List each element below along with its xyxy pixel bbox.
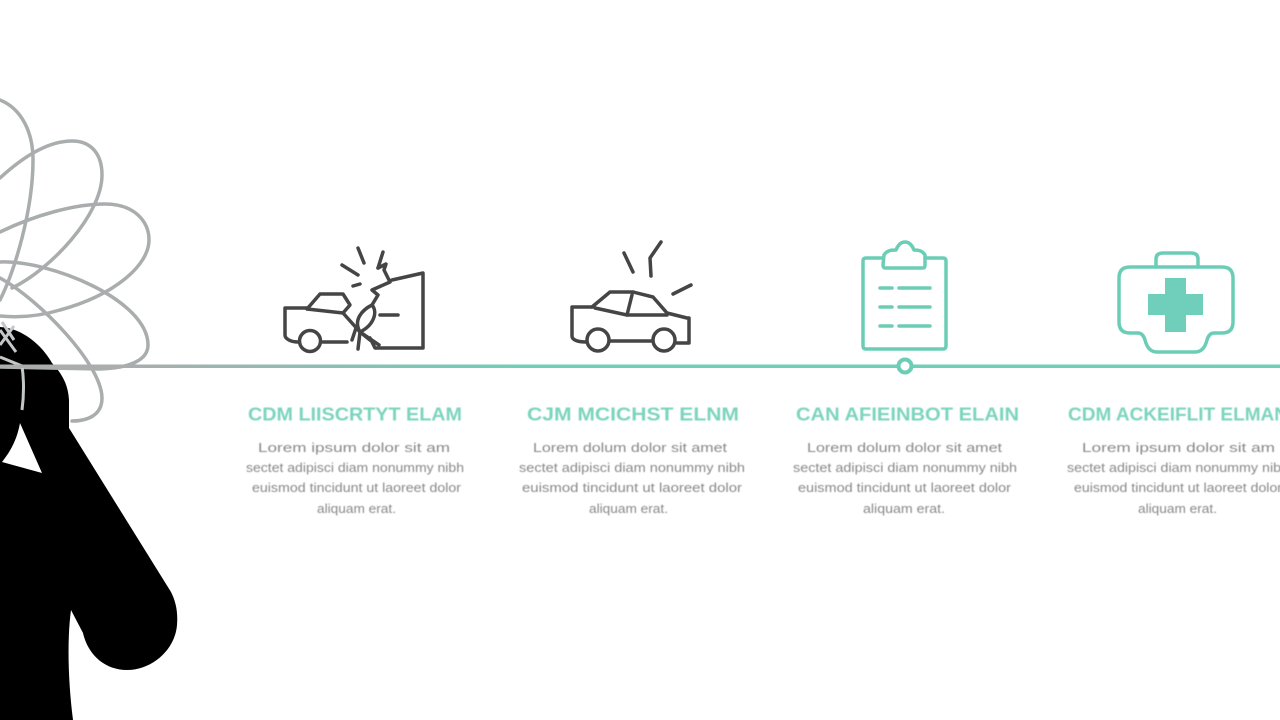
- icon: damaged car: [572, 242, 691, 351]
- heading: CJM MCICHST ELNM: [527, 404, 739, 424]
- timeline node: [898, 360, 912, 372]
- column 2 text: [519, 404, 745, 516]
- body text: sectet adipisci diam nonummy nibh: [793, 461, 1017, 475]
- body text: euismod tincidunt ut laoreet dolor: [798, 481, 1011, 495]
- body text: euismod tincidunt ut laoreet dolor: [522, 481, 742, 495]
- body text: Lorem ipsum dolor sit am: [258, 441, 450, 455]
- icon: car crashing into wall: [285, 248, 423, 352]
- body text: [1067, 441, 1280, 516]
- body text: sectet adipisci diam nonummy nibh: [246, 461, 464, 475]
- medical cross: [1148, 278, 1203, 332]
- column 4 text: [1067, 404, 1280, 516]
- column 3 text: [793, 404, 1019, 516]
- body text: aliquam erat.: [589, 502, 668, 516]
- body text: Lorem ipsum dolor sit am: [1082, 441, 1275, 455]
- heading: CDM LIISCRTYT ELAM: [248, 404, 462, 424]
- body text: Lorem dolum dolor sit amet: [807, 441, 1003, 455]
- body text: [793, 441, 1017, 516]
- checklist rows: [880, 288, 930, 326]
- heading: CDM ACKEIFLIT ELMAN: [1068, 404, 1280, 424]
- body text: aliquam erat.: [1138, 502, 1217, 516]
- body text: [519, 441, 745, 516]
- person silhouette holding head: [0, 327, 177, 720]
- icon: clipboard checklist: [863, 242, 946, 349]
- timeline line: [0, 364, 1280, 368]
- body text: Lorem dolum dolor sit amet: [533, 441, 728, 455]
- body text: [246, 441, 464, 516]
- body text: euismod tincidunt ut laoreet dolor: [252, 481, 461, 495]
- body text: sectet adipisci diam nonummy nibh: [519, 461, 745, 475]
- body text: euismod tincidunt ut laoreet dolor: [1074, 481, 1280, 495]
- column 1 text: [246, 404, 464, 516]
- body text: aliquam erat.: [317, 502, 396, 516]
- icon: first aid kit: [1119, 253, 1233, 352]
- gap between head and hand: [2, 423, 42, 473]
- body text: sectet adipisci diam nonummy nibh: [1067, 461, 1280, 475]
- body text: aliquam erat.: [863, 502, 945, 516]
- heading: CAN AFIEINBOT ELAIN: [796, 404, 1019, 424]
- tangled scribble loops above head: [0, 100, 149, 421]
